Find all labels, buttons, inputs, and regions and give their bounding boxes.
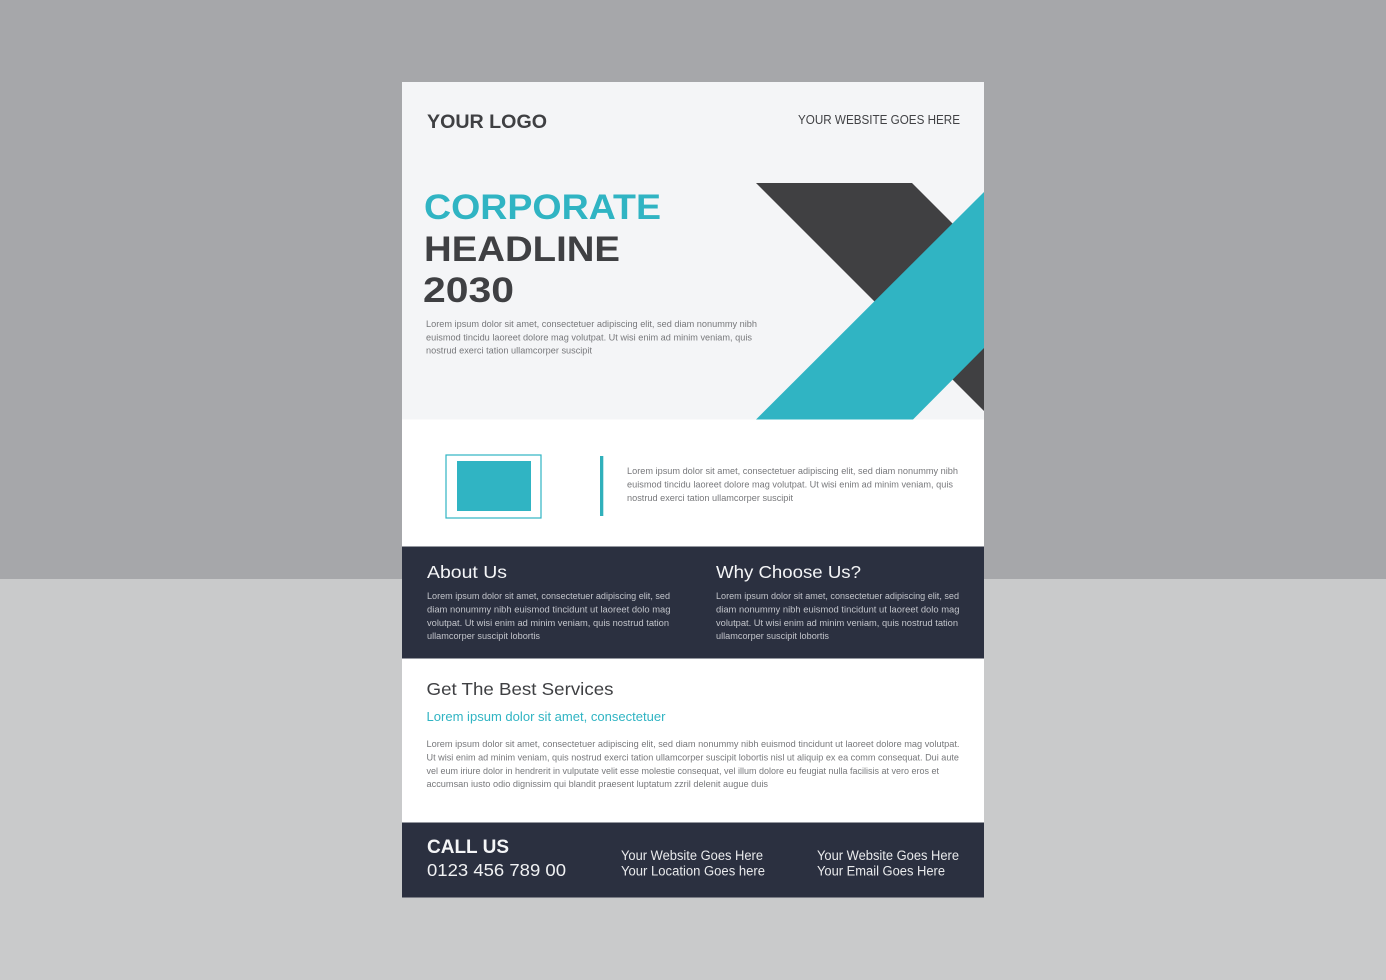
image placeholder	[446, 455, 541, 518]
intro paragraph: nostrud exerci tation ullamcorper suscipit	[627, 493, 793, 504]
headline	[423, 188, 661, 310]
hero paragraph: nostrud exerci tation ullamcorper suscipit	[426, 346, 592, 356]
panel: about and why	[402, 546, 984, 658]
panel: image and intro	[402, 420, 984, 546]
about text: Lorem ipsum dolor sit amet, consectetuer adipiscing elit, sed	[427, 591, 670, 602]
about text	[427, 591, 670, 642]
why text	[716, 591, 960, 642]
website and location: Your Website Goes Here	[621, 848, 763, 863]
why text: ullamcorper suscipit lobortis	[716, 631, 829, 642]
backdrop wall	[0, 0, 1386, 579]
why text: diam nonummy nibh euismod tincidunt ut laoreet dolo mag	[716, 604, 960, 616]
why heading: Why Choose Us?	[716, 562, 861, 582]
website and location: Your Location Goes here	[621, 864, 765, 878]
footer background	[402, 822, 984, 898]
intro background	[402, 420, 984, 546]
website and email: Your Email Goes Here	[817, 864, 945, 878]
about text: volutpat. Ut wisi enim ad minim veniam, quis nostrud tation	[427, 618, 669, 629]
panel: services	[402, 658, 984, 822]
teal diagonal shape	[756, 192, 984, 420]
panel: hero header	[402, 82, 984, 420]
about text: diam nonummy nibh euismod tincidunt ut laoreet dolo mag	[427, 604, 670, 616]
why text: Lorem ipsum dolor sit amet, consectetuer adipiscing elit, sed	[716, 591, 959, 602]
services paragraph	[426, 739, 960, 790]
hero paragraph	[426, 319, 757, 356]
intro paragraph: euismod tincidu laoreet dolore mag volutpat. Ut wisi enim ad minim veniam, quis	[627, 480, 953, 490]
services paragraph: Ut wisi enim ad minim veniam, quis nostrud exerci tation ullamcorper suscipit lobortis nisl ut aliquip ex ea comm consequat. Dui aute	[426, 752, 959, 764]
services paragraph: accumsan iusto odio dignissim qui blandit praesent luptatum zzril delenit augue duis	[426, 779, 768, 790]
website label: YOUR WEBSITE GOES HERE	[798, 113, 960, 127]
panel: footer contact	[402, 822, 984, 898]
headline: CORPORATE	[424, 188, 661, 227]
band background	[402, 546, 984, 658]
hero background	[402, 82, 984, 420]
headline: 2030	[423, 271, 514, 310]
about heading: About Us	[427, 562, 507, 582]
vertical accent bar	[600, 456, 603, 516]
website and location	[621, 848, 765, 878]
backdrop floor	[0, 579, 1386, 980]
intro paragraph	[627, 466, 958, 504]
hero paragraph: euismod tincidu laoreet dolore mag volutpat. Ut wisi enim ad minim veniam, quis	[426, 332, 752, 344]
panel: flyer page	[402, 82, 984, 898]
phone number: 0123 456 789 00	[427, 860, 566, 880]
hero paragraph: Lorem ipsum dolor sit amet, consectetuer adipiscing elit, sed diam nonummy nibh	[426, 319, 757, 330]
logo: YOUR LOGO	[427, 111, 547, 133]
website and email: Your Website Goes Here	[817, 848, 959, 863]
services subheading: Lorem ipsum dolor sit amet, consectetuer	[426, 709, 666, 724]
why text: volutpat. Ut wisi enim ad minim veniam, quis nostrud tation	[716, 618, 958, 629]
intro paragraph: Lorem ipsum dolor sit amet, consectetuer adipiscing elit, sed diam nonummy nibh	[627, 466, 958, 477]
services background	[402, 658, 984, 822]
services paragraph: Lorem ipsum dolor sit amet, consectetuer adipiscing elit, sed diam nonummy nibh euismod tincidunt ut laoreet dolore mag volutpat.	[426, 739, 960, 750]
headline: HEADLINE	[424, 230, 620, 269]
services paragraph: vel eum iriure dolor in hendrerit in vulputate velit esse molestie consequat, vel illum dolore eu feugiat nulla facilisis at vero eros et	[426, 766, 939, 777]
call us label: CALL US	[427, 837, 509, 858]
about text: ullamcorper suscipit lobortis	[427, 631, 540, 642]
services heading: Get The Best Services	[426, 679, 614, 699]
website and email	[817, 848, 959, 878]
dark diagonal shape	[756, 183, 984, 411]
